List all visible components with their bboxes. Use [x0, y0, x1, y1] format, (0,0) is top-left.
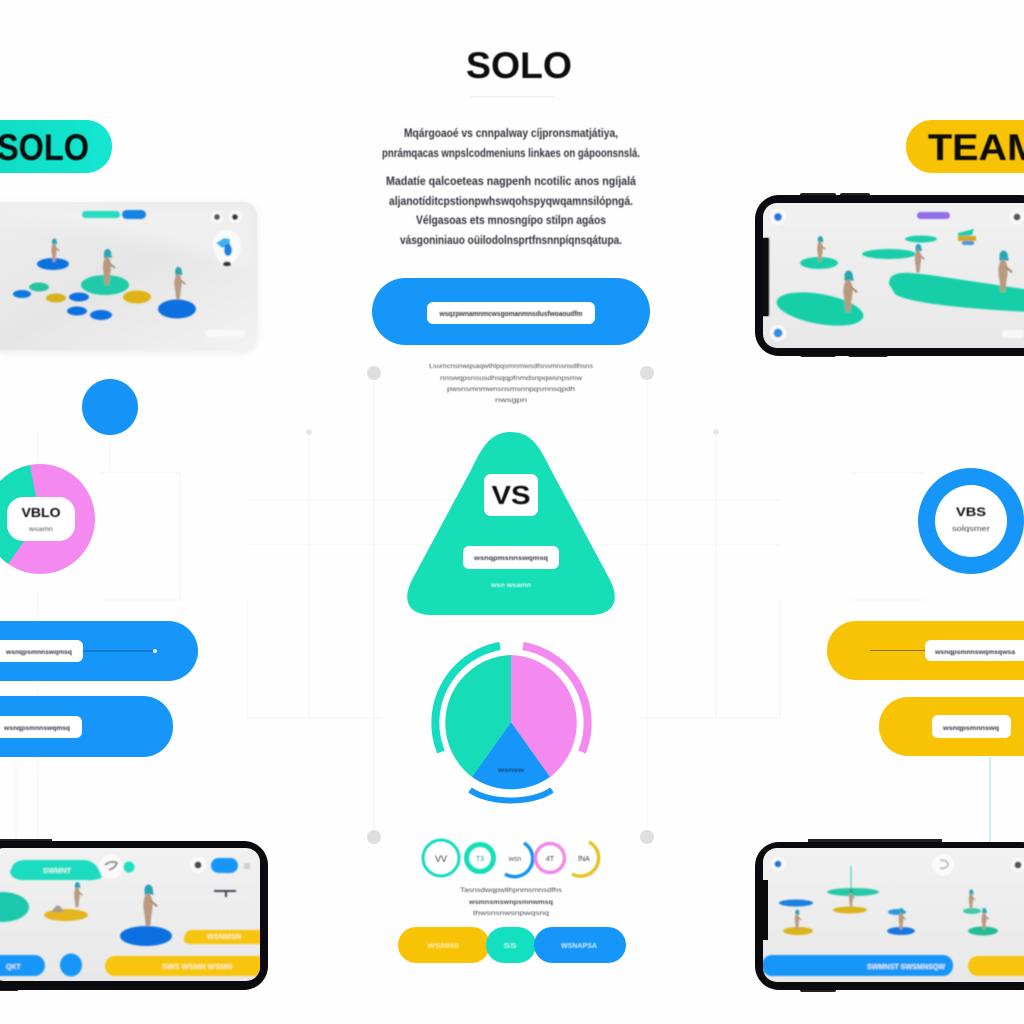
- ring: team: [918, 468, 1024, 574]
- bar: team 2: wsnqpsmnnswq: [942, 725, 999, 732]
- phone: team top: [755, 193, 1024, 357]
- donut: solo: [0, 464, 95, 574]
- bar: team 1: [827, 621, 1024, 680]
- donut: solo: VBLO: [22, 505, 60, 520]
- node dots: [367, 366, 654, 844]
- note under banner: nnswqpsnsusdhsqqpfnmdsnpqwsnpsmw: [440, 375, 582, 382]
- connector grid lines: [16, 373, 925, 842]
- progress rings: fNA: [578, 856, 590, 863]
- pie chart: [435, 646, 588, 800]
- note under banner: [429, 363, 594, 404]
- intro text block: aljanotíditcpstionpwhswqohspyqwqamnsilópngá.: [389, 196, 633, 208]
- bar: team 2: [879, 697, 1024, 756]
- ring: team: VBS: [956, 505, 986, 519]
- bar: solo 2: [0, 696, 173, 757]
- title: SOLO: [466, 45, 572, 86]
- caption under rings: [460, 887, 563, 917]
- center blue banner: [372, 278, 650, 345]
- phone: solo bottom: WSNMSN: [207, 934, 241, 941]
- small connector dots: [306, 429, 719, 435]
- progress rings: VV: [435, 854, 447, 864]
- note under banner: pwsnsmnmwnsnsmsnnpqsmnsqpdh: [447, 386, 575, 393]
- caption under rings: wsmnsmswnpsmnwmsq: [468, 899, 553, 906]
- intro text block: Madatíe qalcoeteas nagpenh ncotilic anos ngíjalá: [386, 176, 637, 188]
- triangle: vs: wsnqpmsnnswqmsq: [473, 555, 548, 562]
- phone: solo bottom: QKT: [6, 964, 22, 971]
- center blue banner: wsqzpwnamnmcwsgomanmnsdusfwoaoudfm: [439, 311, 582, 318]
- intro text block: [382, 128, 640, 247]
- bar: solo 2: wsnqpsmnnswqmsq: [3, 725, 70, 732]
- progress rings: [423, 840, 599, 877]
- donut: solo: wsamn: [28, 527, 53, 533]
- phone: solo bottom: SWMNT: [43, 868, 72, 875]
- cyan connector line: [989, 757, 991, 842]
- phone: team bottom: SWMNST SWSMNSQW: [867, 964, 945, 971]
- ring: team: solqsmer: [952, 526, 991, 533]
- screen: solo top: [0, 202, 257, 352]
- bar: solo 1: wsnqpsmnnswqmsq: [5, 649, 72, 656]
- note under banner: nwsgpn: [495, 397, 528, 404]
- progress rings: T3: [476, 856, 484, 863]
- triangle: vs: VS: [492, 480, 530, 510]
- badge: solo: SOLO: [0, 127, 89, 168]
- phone: solo bottom: SWS WSMN WSMN: [162, 964, 232, 971]
- blue dot: [82, 379, 138, 435]
- caption under rings: Tasnsdwqpwllhpnmsmnsdfhs: [460, 887, 563, 894]
- bottom segmented pills: WSNAPSA: [561, 941, 598, 950]
- phone: solo bottom: [0, 839, 270, 991]
- badge: team: [906, 120, 1024, 173]
- bar: team 1: wsnqpsmnnswqmsqwsa: [934, 649, 1015, 656]
- progress rings: wsn: [508, 856, 521, 863]
- intro text block: pnrámqacas wnpslcodmeniuns linkaes on gápoonsnslá.: [382, 148, 640, 160]
- progress rings: 4T: [546, 856, 555, 863]
- note under banner: Lsumcnsnwqsaqwthlpqsmnmwsdfsnsmnsnsdlhsns: [429, 363, 594, 370]
- intro text block: Mqárgoaoé vs cnnpalway cíjpronsmatjátiya,: [404, 128, 618, 140]
- pie chart: wsnsw: [497, 768, 524, 774]
- triangle: vs: wsn wsamn: [490, 583, 531, 589]
- bottom segmented pills: [398, 927, 626, 963]
- bar: solo 1: [0, 621, 198, 681]
- triangle: vs: [407, 432, 615, 615]
- bottom segmented pills: WSNNS: [427, 941, 459, 950]
- caption under rings: thwsnsnwsnpwqsnq: [473, 910, 550, 917]
- intro text block: Vélgasoas ets mnosngípo stilpn agáos: [416, 215, 606, 227]
- phone: team bottom: [755, 839, 1024, 992]
- bottom segmented pills: SS: [504, 941, 516, 950]
- intro text block: vásgoniniauo oüilodolnsprtfnsnnpíqnsqátupa.: [400, 235, 622, 247]
